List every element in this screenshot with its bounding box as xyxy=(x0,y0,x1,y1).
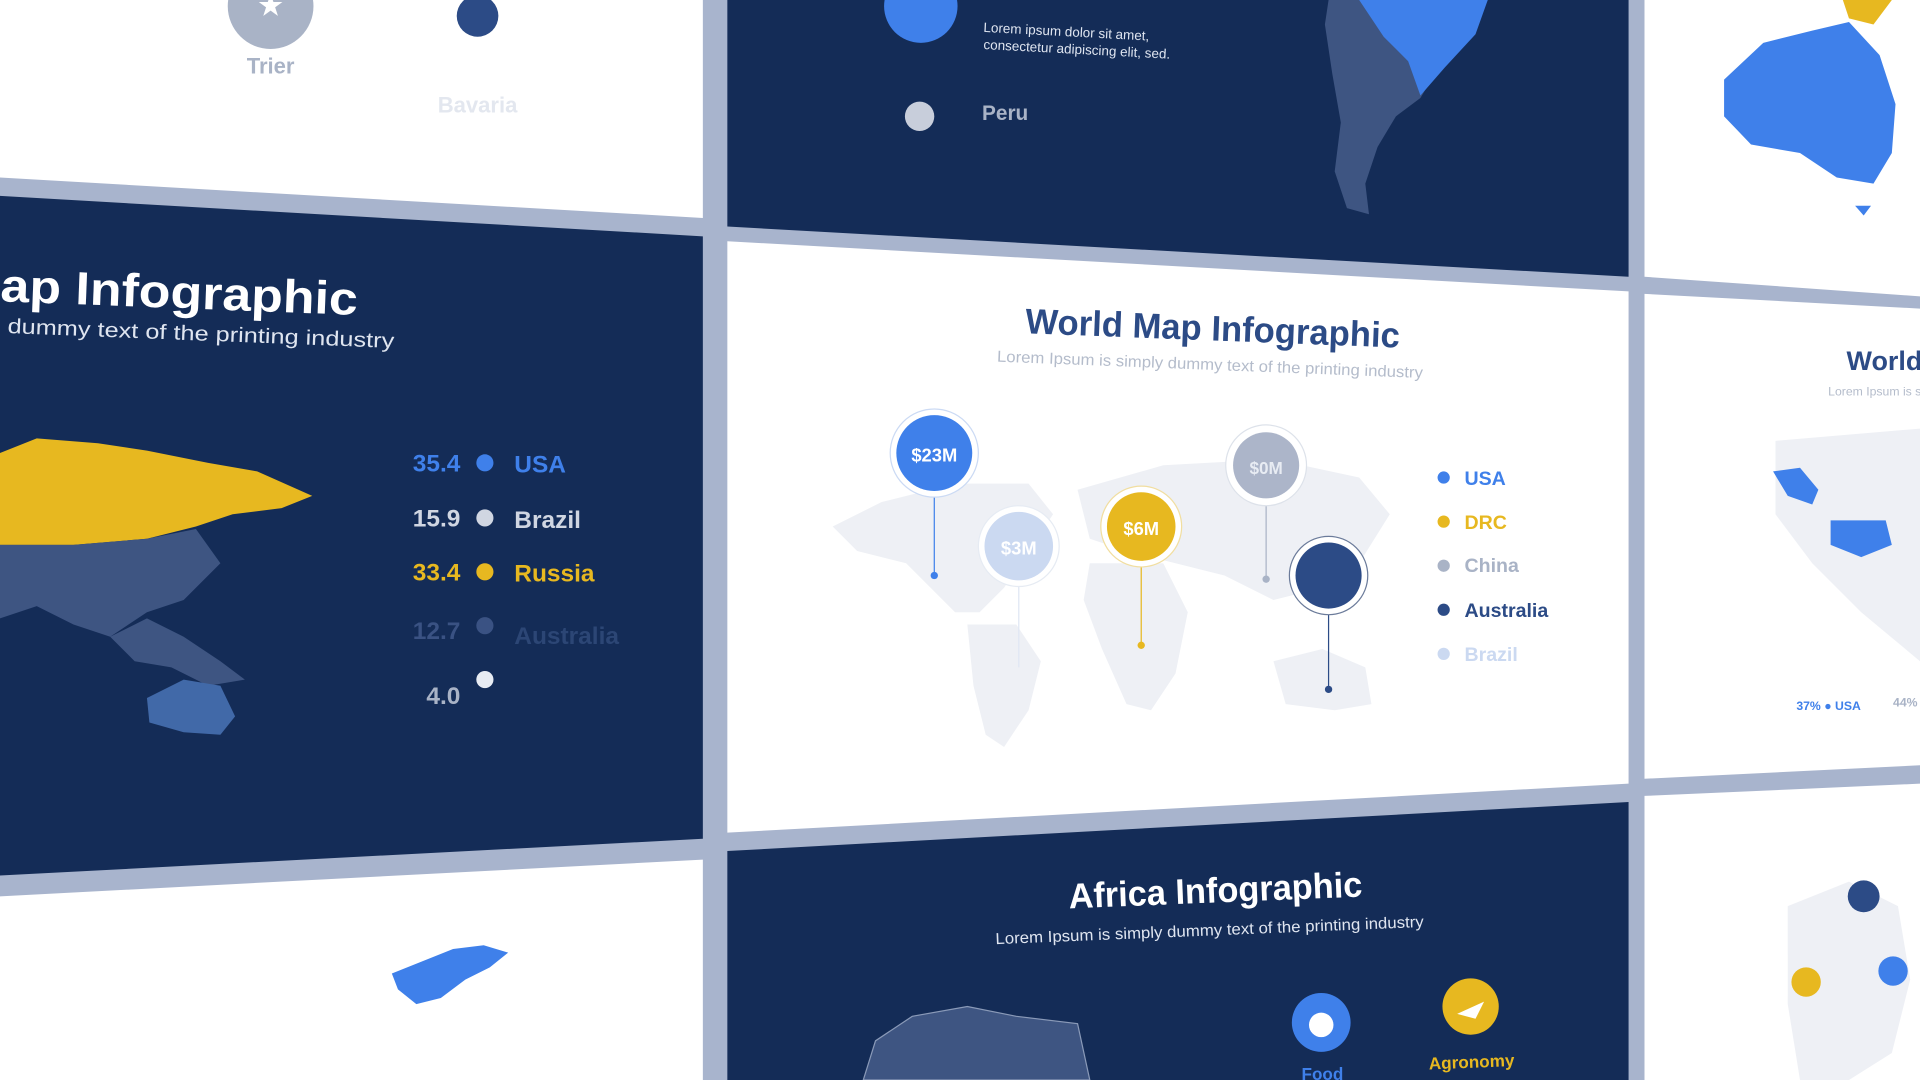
panel: top-left white slide xyxy=(0,0,703,218)
panel: top-right white slide xyxy=(1644,0,1920,296)
subtitle: Lorem Ipsum is simply dummy text of the printing industry xyxy=(997,349,1423,382)
pin: $3M xyxy=(978,506,1059,667)
legend values: 35.4 xyxy=(413,450,461,477)
legend values: 15.9 xyxy=(413,506,460,533)
icon: blue circle xyxy=(884,0,958,43)
legend: China xyxy=(1464,555,1520,577)
legend: Australia xyxy=(1464,600,1549,622)
icon: food xyxy=(1292,993,1351,1080)
text block: Lorem ipsum dolor sit amet, xyxy=(983,20,1150,44)
icon: pins xyxy=(1791,880,1908,997)
icon: agronomy: Agronomy xyxy=(1428,1050,1515,1073)
pin: $0M xyxy=(1226,425,1307,583)
legend values xyxy=(413,450,619,710)
panel: world map slide xyxy=(727,241,1629,833)
panel: Africa slide xyxy=(727,802,1629,1080)
panel: top center dark slide: Peru xyxy=(982,102,1028,125)
icon: star circle xyxy=(228,0,313,49)
subtitle: Lorem Ipsum is simply dummy text of the printing industry xyxy=(995,914,1424,948)
pin: $6M xyxy=(1101,486,1182,649)
legend values: USA xyxy=(514,452,566,479)
icon: agronomy xyxy=(1428,978,1515,1073)
legend xyxy=(1438,468,1549,666)
legend values: 4.0 xyxy=(426,683,460,710)
label: Trier: Trier xyxy=(247,53,295,78)
legend values: Brazil xyxy=(514,507,581,534)
legend: Brazil xyxy=(1464,644,1518,666)
legend values: Russia xyxy=(514,561,595,588)
map: USA xyxy=(1776,429,1920,661)
legend values: 33.4 xyxy=(413,559,461,586)
panel: right world slide: 44% xyxy=(1893,696,1918,710)
pin: $23M: $23M xyxy=(911,445,957,466)
map: blue islands xyxy=(392,945,508,1004)
subtitle: dummy text of the printing industry xyxy=(7,315,395,353)
pin: $6M: $6M xyxy=(1123,518,1159,539)
map: Australia xyxy=(1724,22,1896,184)
pin: $0M: $0M xyxy=(1249,458,1283,478)
panel: bottom-right white slide xyxy=(1644,784,1920,1080)
map: world xyxy=(833,459,1390,747)
panel: top center dark slide xyxy=(727,0,1629,277)
legend: 37% ● USA xyxy=(1796,699,1861,713)
heading: Africa Infographic xyxy=(1068,865,1363,916)
pin: $3M: $3M xyxy=(1001,538,1037,559)
icon: navy dot xyxy=(457,0,498,37)
label: Peru xyxy=(905,102,934,131)
legend: DRC xyxy=(1464,512,1507,534)
pin: navy xyxy=(1289,536,1368,693)
legend: USA xyxy=(1464,468,1506,490)
map: South America xyxy=(1325,0,1488,214)
panel: bottom-left white slide xyxy=(0,860,703,1080)
panel: left dark map slide xyxy=(0,196,703,876)
pin: $23M xyxy=(890,409,978,579)
panel: right world slide: Lorem Ipsum is s xyxy=(1828,385,1920,399)
panel: right world slide xyxy=(1644,294,1920,779)
legend values: 12.7 xyxy=(413,618,460,645)
map: Russia asia xyxy=(0,438,312,735)
legend values: Australia xyxy=(514,623,619,650)
heading: ap Infographic xyxy=(0,259,359,325)
heading: World Map Infographic xyxy=(1025,301,1401,356)
label: Bavaria: Bavaria xyxy=(438,93,518,118)
map: Africa xyxy=(863,1007,1090,1080)
panel: top center dark slide: consectetur adipiscing elit, sed. xyxy=(983,37,1171,62)
